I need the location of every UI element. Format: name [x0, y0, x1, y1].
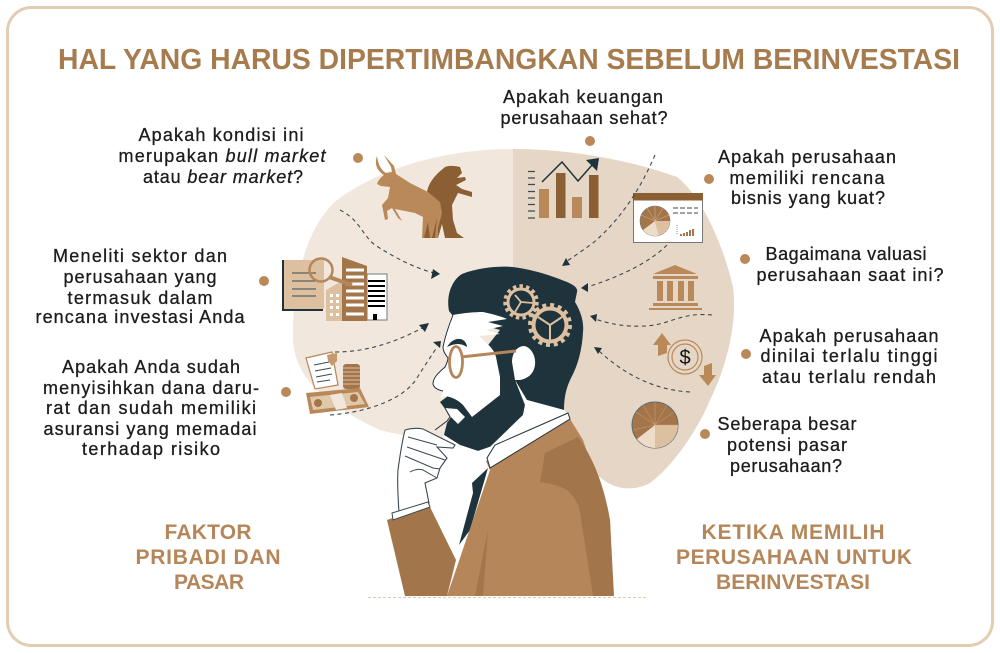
- text: company finances: [500, 87, 668, 128]
- text: emergency fund and insurance: asuransi yang memadai: [44, 419, 256, 439]
- heading: choosing a company: BERINVESTASI: [716, 571, 870, 594]
- jacket: [447, 419, 613, 596]
- icon: money, coins and insurance document: [306, 352, 369, 414]
- text: business plan: memiliki rencana: [730, 168, 885, 188]
- text: company finances: Apakah keuangan: [503, 87, 663, 107]
- icon: bar chart with trend arrow: [528, 158, 599, 218]
- text: emergency fund and insurance: terhadap risiko: [82, 439, 220, 459]
- icon: dollar with up and down arrows: $: [679, 347, 691, 369]
- text: over or undervalued: atau terlalu rendah: [762, 367, 936, 387]
- text: bull or bear market: Apakah kondisi ini: [138, 125, 304, 145]
- arrow: sectors to head: [335, 323, 429, 352]
- background blob: personal and market factors: [293, 149, 513, 445]
- text: over or undervalued: dinilai terlalu tinggi: [760, 346, 938, 366]
- tie: [459, 468, 488, 545]
- text: market potential: potensi pasar: [727, 435, 847, 455]
- glasses: [450, 346, 516, 378]
- text: emergency fund and insurance: rat dan sudah memiliki: [46, 398, 256, 418]
- text: valuation: Bagaimana valuasi: [766, 244, 926, 264]
- text: research sectors: Meneliti sektor dan: [53, 246, 227, 266]
- jacket shadow: [540, 437, 614, 596]
- arrow: valuation to head: [590, 314, 712, 326]
- heading: choosing a company: [676, 521, 912, 594]
- icon: dollar with up and down arrows: [653, 333, 716, 386]
- eyebrow: [447, 339, 467, 347]
- chest: [387, 435, 495, 596]
- text: company finances: perusahaan sehat?: [500, 108, 668, 128]
- arrow: savings to head: [330, 341, 441, 415]
- bullet points: [259, 136, 751, 439]
- heading: choosing a company: KETIKA MEMILIH: [702, 521, 884, 544]
- title: HAL YANG HARUS DIPERTIMBANGKAN SEBELUM BERINVESTASI: [58, 44, 960, 76]
- text: business plan: [718, 147, 896, 208]
- arrow: finances to head: [562, 155, 655, 266]
- icon: bear: [424, 166, 472, 238]
- text: emergency fund and insurance: menyisihkan dana daru-: [43, 378, 259, 398]
- heading: personal and market factors: PASAR: [174, 571, 244, 594]
- heading: personal and market factors: PRIBADI DAN: [136, 546, 280, 569]
- text: emergency fund and insurance: Apakah Anda sudah: [62, 357, 240, 377]
- ground line: [368, 596, 648, 598]
- text: market potential: perusahaan?: [730, 456, 842, 476]
- text: valuation: perusahaan saat ini?: [756, 265, 944, 285]
- icon: documents, magnifier and buildings: [283, 257, 387, 321]
- sleeve: [387, 505, 456, 596]
- finger lines: [405, 437, 445, 478]
- text: research sectors: [36, 246, 245, 327]
- shirt cuff: [392, 502, 430, 520]
- heading: personal and market factors: [136, 521, 280, 594]
- face outline: [433, 315, 453, 391]
- text: over or undervalued: [760, 326, 938, 387]
- background blob: company factors: [513, 149, 734, 488]
- text: over or undervalued: Apakah perusahaan: [760, 326, 938, 346]
- gears in head: [505, 286, 570, 345]
- text: valuation: [756, 244, 944, 285]
- text: bull or bear market: atau bear market?: [143, 167, 303, 187]
- lips: [445, 408, 465, 424]
- text: research sectors: rencana investasi Anda: [36, 307, 245, 327]
- icon: business plan report: [633, 193, 703, 242]
- arrow: over or undervalued to head: [594, 347, 690, 392]
- shirt collar: [487, 413, 570, 468]
- icon: bank building: [649, 265, 702, 310]
- text: research sectors: termasuk dalam: [68, 288, 212, 308]
- ear: [512, 346, 535, 380]
- text: business plan: Apakah perusahaan: [718, 147, 896, 167]
- arrow: business plan to head: [581, 245, 667, 292]
- heading: choosing a company: PERUSAHAAN UNTUK: [676, 546, 912, 569]
- text: research sectors: perusahaan yang: [64, 267, 216, 287]
- text: bull or bear market: merupakan bull market: [118, 146, 326, 166]
- heading: personal and market factors: FAKTOR: [164, 521, 252, 544]
- jacket fold: [475, 530, 488, 596]
- text: market potential: [718, 414, 856, 476]
- text: bull or bear market: [118, 125, 326, 187]
- icon: bull: [376, 155, 442, 238]
- neck: [490, 380, 568, 447]
- chin outline and finger tip: [435, 408, 450, 430]
- icon: market potential pie chart: [632, 402, 678, 448]
- face: [433, 312, 507, 417]
- bull leg shading: [424, 218, 437, 238]
- text: emergency fund and insurance: [43, 357, 259, 459]
- text: business plan: bisnis yang kuat?: [731, 188, 885, 208]
- hair and beard silhouette: [440, 267, 583, 451]
- text: market potential: Seberapa besar: [718, 414, 856, 434]
- hand: [398, 428, 455, 513]
- illustration: thinking man: [387, 267, 614, 596]
- arrow: bull market to head: [340, 210, 440, 279]
